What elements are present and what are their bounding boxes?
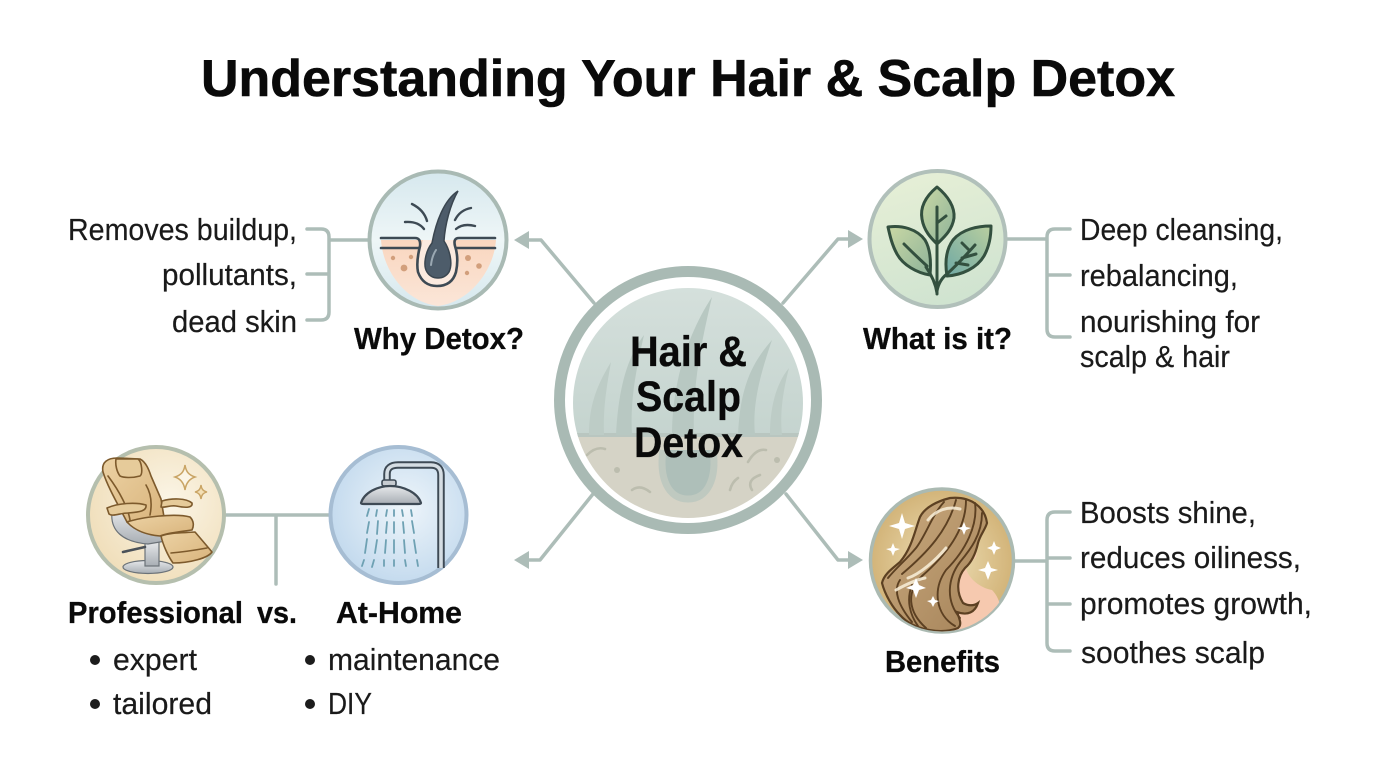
connector: Benefits bracket — [1015, 512, 1070, 651]
heading: Professional vs. At-Home — [68, 595, 462, 630]
icon: plant leaves — [870, 171, 1006, 307]
hub label: Hair & — [630, 328, 747, 376]
central hub: Hair & Scalp Detox — [560, 272, 816, 528]
arrow: center to What is it — [783, 230, 863, 303]
text: what is it list: nourishing for — [1080, 304, 1260, 339]
icon: salon chair — [88, 447, 224, 583]
hub label: Scalp — [636, 373, 741, 421]
list: professional bullets — [90, 642, 212, 721]
connector: Professional vs At-Home — [225, 515, 330, 584]
text: benefits list: reduces oiliness, — [1080, 540, 1301, 575]
text: what is it list: rebalancing, — [1080, 258, 1238, 293]
list: at-home bullets: DIY — [328, 686, 372, 721]
heading: Benefits: Benefits — [885, 644, 1000, 679]
list: professional bullets: tailored — [113, 686, 212, 721]
list: professional bullets: expert — [113, 642, 197, 677]
title: Understanding Your Hair & Scalp Detox — [201, 50, 1175, 108]
icon: shiny hair — [870, 489, 1014, 640]
heading: Professional vs. At-Home: At-Home — [336, 595, 462, 630]
text: benefits list: promotes growth, — [1080, 586, 1312, 621]
text: why detox list — [68, 212, 297, 339]
text: why detox list: dead skin — [172, 304, 297, 339]
text: why detox list: pollutants, — [162, 257, 297, 292]
text: what is it list: scalp & hair — [1080, 339, 1230, 374]
heading: Professional vs. At-Home: vs. — [257, 595, 297, 630]
heading: Why Detox?: Why Detox? — [354, 321, 524, 356]
connector: Why Detox bracket — [307, 229, 368, 320]
arrow: center to Benefits — [786, 494, 863, 569]
hub label — [630, 328, 747, 467]
text: benefits list: Boosts shine, — [1080, 495, 1256, 530]
arrow: center to Professional vs At-Home — [514, 494, 593, 569]
heading: Professional vs. At-Home: Professional — [68, 595, 243, 630]
icon: hair follicle — [370, 172, 506, 308]
text: what is it list — [1080, 212, 1283, 374]
text: benefits list: soothes scalp — [1081, 635, 1265, 670]
hub illustration: hair and scalp cross-section — [570, 285, 806, 525]
hub label: Detox — [634, 419, 743, 467]
text: what is it list: Deep cleansing, — [1080, 212, 1283, 247]
heading: What is it?: What is it? — [863, 321, 1012, 356]
list: at-home bullets: maintenance — [328, 642, 500, 677]
icon: shower head — [330, 447, 466, 583]
arrow: center to Why Detox — [514, 231, 594, 303]
list: at-home bullets — [305, 642, 500, 721]
connector: What is it bracket — [1007, 229, 1070, 337]
text: benefits list — [1080, 495, 1312, 670]
text: why detox list: Removes buildup, — [68, 212, 297, 247]
